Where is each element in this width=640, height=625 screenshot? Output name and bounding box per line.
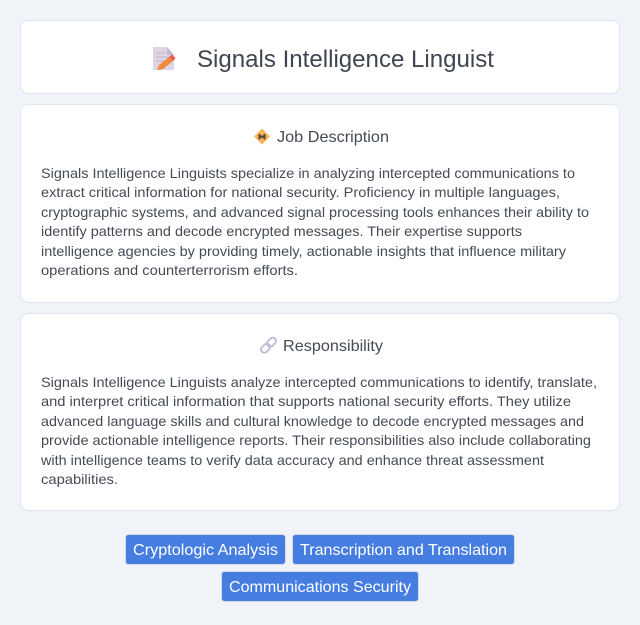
text block: responsibility [40,374,597,487]
panel: responsibility [20,314,620,510]
icon: document with pencil [153,47,176,70]
heading: job description: Job Description [277,129,389,146]
panel: title card [20,20,620,94]
title: Signals Intelligence Linguist [197,46,494,73]
text block: job description: Signals Intelligence Linguists specialize in analyzing intercepted communications to [41,165,575,181]
text block: responsibility: with intelligence teams to verify data accuracy and enhance threat assessment [40,452,544,468]
text block: responsibility: provide actionable intelligence reports. Their responsibilities also include collaborating [41,432,591,448]
text block: responsibility: and interpret critical information that supports national security efforts. They utilize [41,393,571,409]
tag: communications security [222,572,418,602]
panel: job description [20,104,620,302]
icon: orange diamond [254,128,270,144]
text block: responsibility: capabilities. [41,471,118,487]
text block: job description: extract critical information for national security. Proficiency in multiple languages, [41,184,560,200]
text block: job description: intelligence agencies by providing timely, actionable insights that influence military [41,243,566,259]
text block: responsibility: Signals Intelligence Linguists analyze intercepted communications to identify, translate, [41,374,597,390]
tag: transcription and translation [292,534,514,564]
text block: job description: operations and counterterrorism efforts. [41,262,298,278]
text block: job description [41,165,589,278]
text block: job description: identify patterns and decode encrypted messages. Their expertise supports [41,223,522,239]
tag: cryptologic analysis: Cryptologic Analysis [133,542,278,559]
text block: job description: cryptographic systems, and advanced signal processing tools enhances their ability to [41,204,589,220]
icon: chain link [260,336,277,354]
tag: transcription and translation: Transcription and Translation [300,542,507,559]
heading: responsibility: Responsibility [283,338,383,355]
text block: responsibility: advanced language skills and cultural knowledge to decode encrypted messages and [41,413,584,429]
tag: cryptologic analysis [126,534,286,564]
tag: communications security: Communications Security [229,579,411,596]
